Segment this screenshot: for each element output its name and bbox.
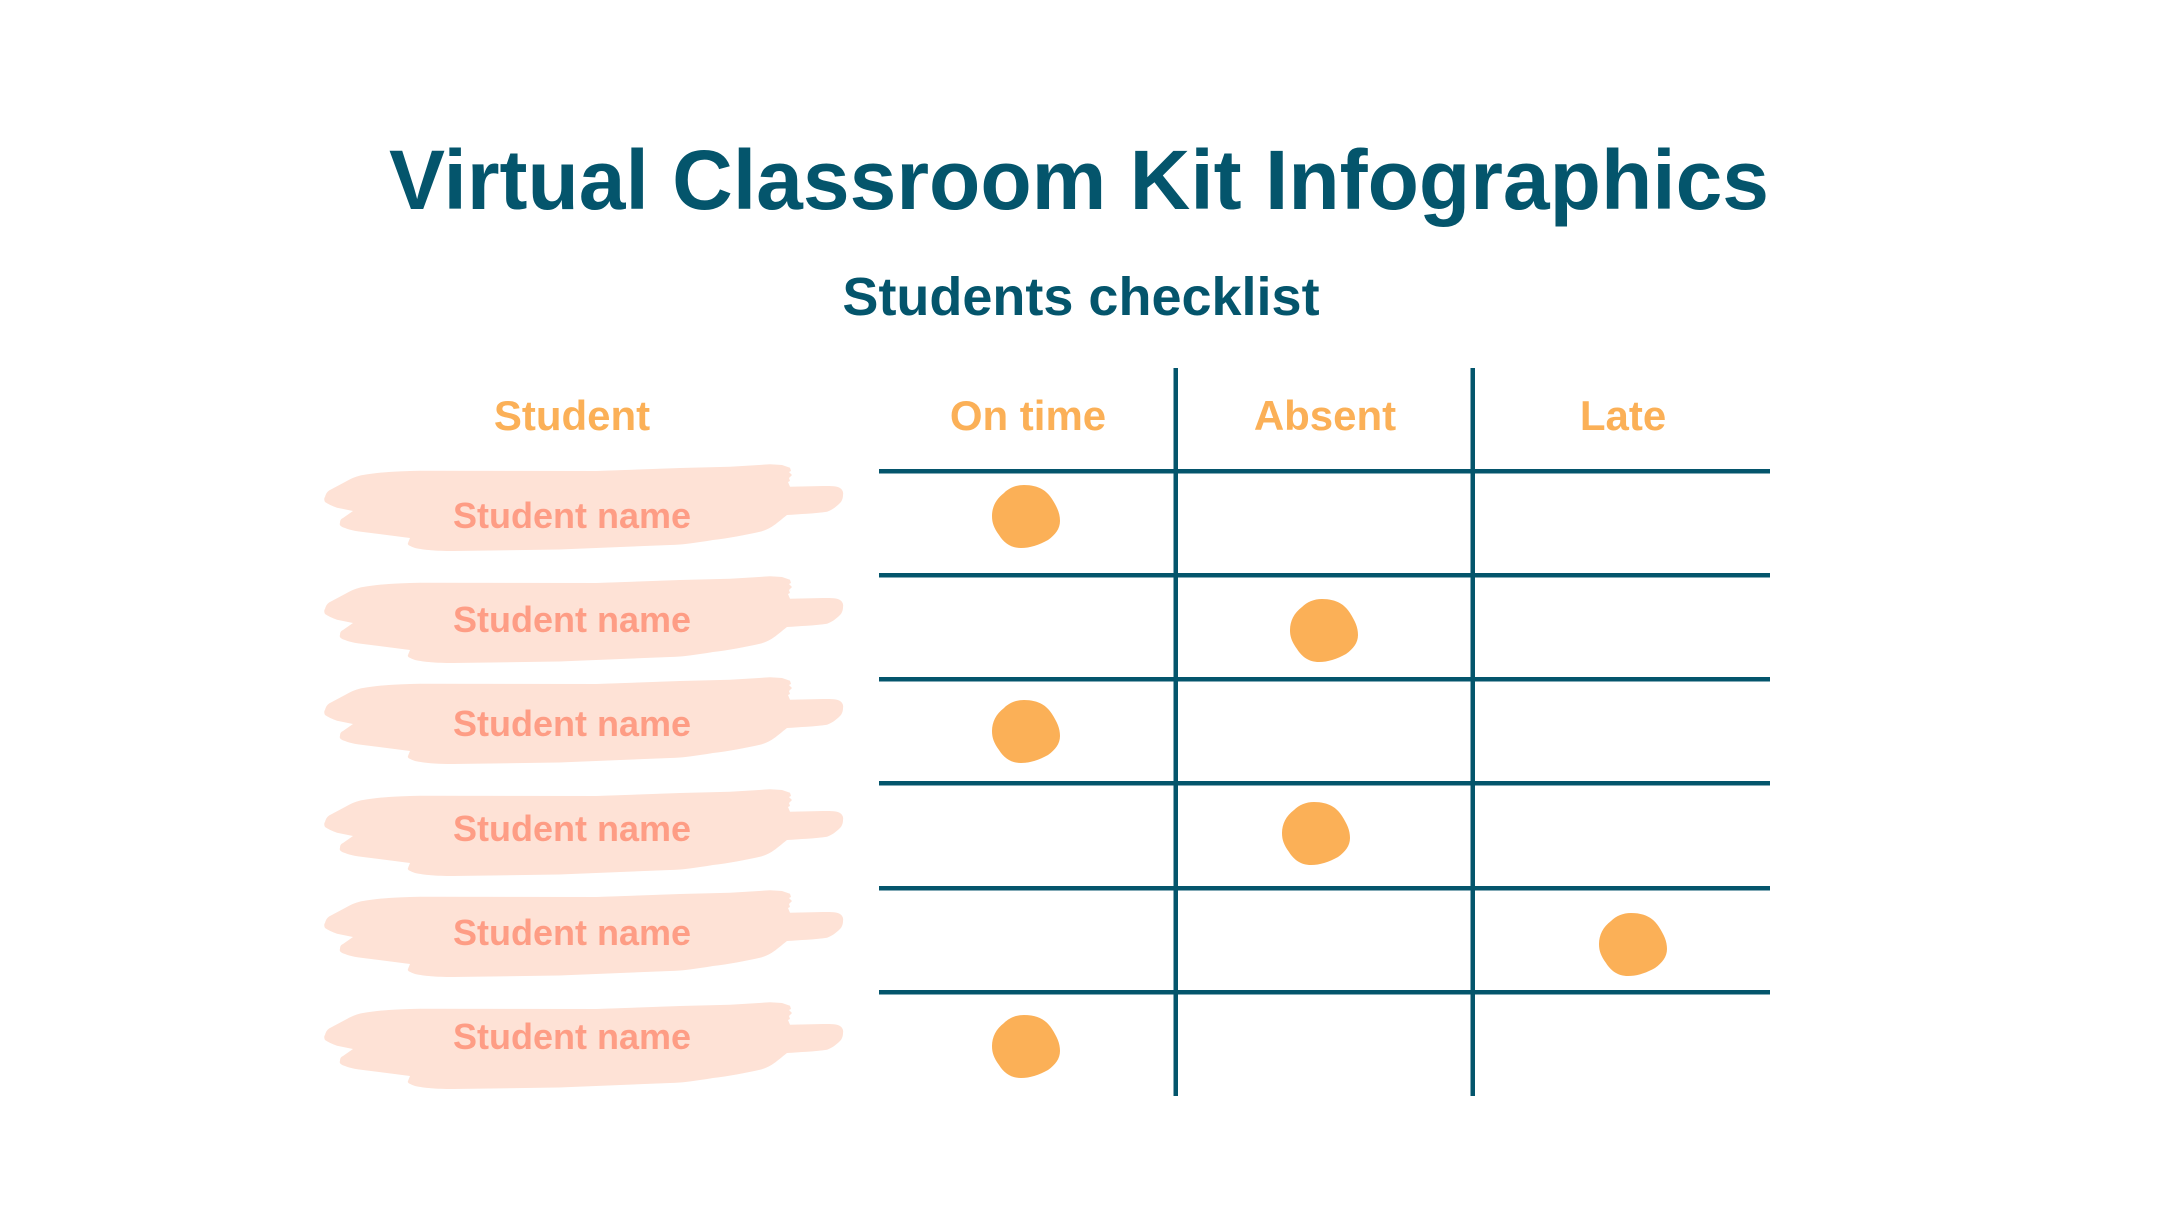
subtitle: Students checklist	[842, 267, 1320, 327]
header: Absent: Absent	[1254, 392, 1396, 439]
mark: row 4 absent	[1282, 802, 1350, 865]
header: On time: On time	[950, 392, 1106, 439]
row 3: brush and name: Student name	[453, 703, 691, 744]
row 2: brush and name: Student name	[453, 599, 691, 640]
header: Late: Late	[1580, 392, 1666, 439]
row 4: brush and name: Student name	[453, 808, 691, 849]
row 3: brush and name	[324, 677, 843, 764]
table grid	[879, 368, 1770, 1096]
row 5: brush and name	[324, 890, 843, 977]
row 1: brush and name: Student name	[453, 495, 691, 536]
row 6: brush and name: Student name	[453, 1016, 691, 1057]
row 2: brush and name	[324, 576, 843, 663]
mark: row 3 on time	[992, 700, 1060, 763]
mark: row 6 on time	[992, 1015, 1060, 1078]
row 5: brush and name: Student name	[453, 912, 691, 953]
row 6: brush and name	[324, 1002, 843, 1089]
student name rows	[324, 464, 843, 1089]
mark: row 1 on time	[992, 485, 1060, 548]
column headers	[494, 392, 1666, 439]
row 4: brush and name	[324, 789, 843, 876]
row 1: brush and name	[324, 464, 843, 551]
mark: row 5 late	[1599, 913, 1667, 976]
header: Student: Student	[494, 392, 650, 439]
mark: row 2 absent	[1290, 599, 1358, 662]
title: Virtual Classroom Kit Infographics	[389, 133, 1769, 227]
attendance marks	[992, 485, 1667, 1078]
